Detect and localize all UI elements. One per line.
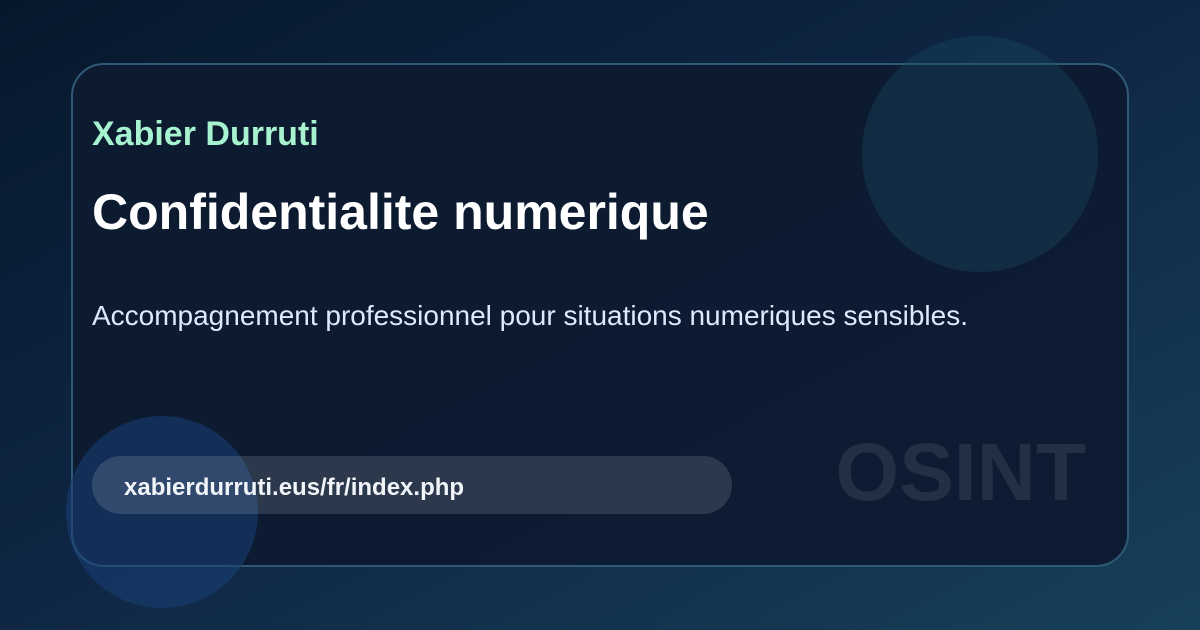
title: Confidentialite numerique (92, 184, 709, 240)
url text: xabierdurruti.eus/fr/index.php (124, 474, 464, 501)
decorative circle: bottom left (66, 416, 258, 608)
decorative circle: top right (862, 36, 1098, 272)
description: Accompagnement professionnel pour situations numeriques sensibles. (92, 300, 968, 331)
url pill (92, 456, 732, 514)
pill background (92, 456, 732, 514)
author name: Xabier Durruti (92, 115, 319, 153)
watermark: OSINT: OSINT (835, 427, 1086, 518)
panel: card (72, 64, 1128, 566)
